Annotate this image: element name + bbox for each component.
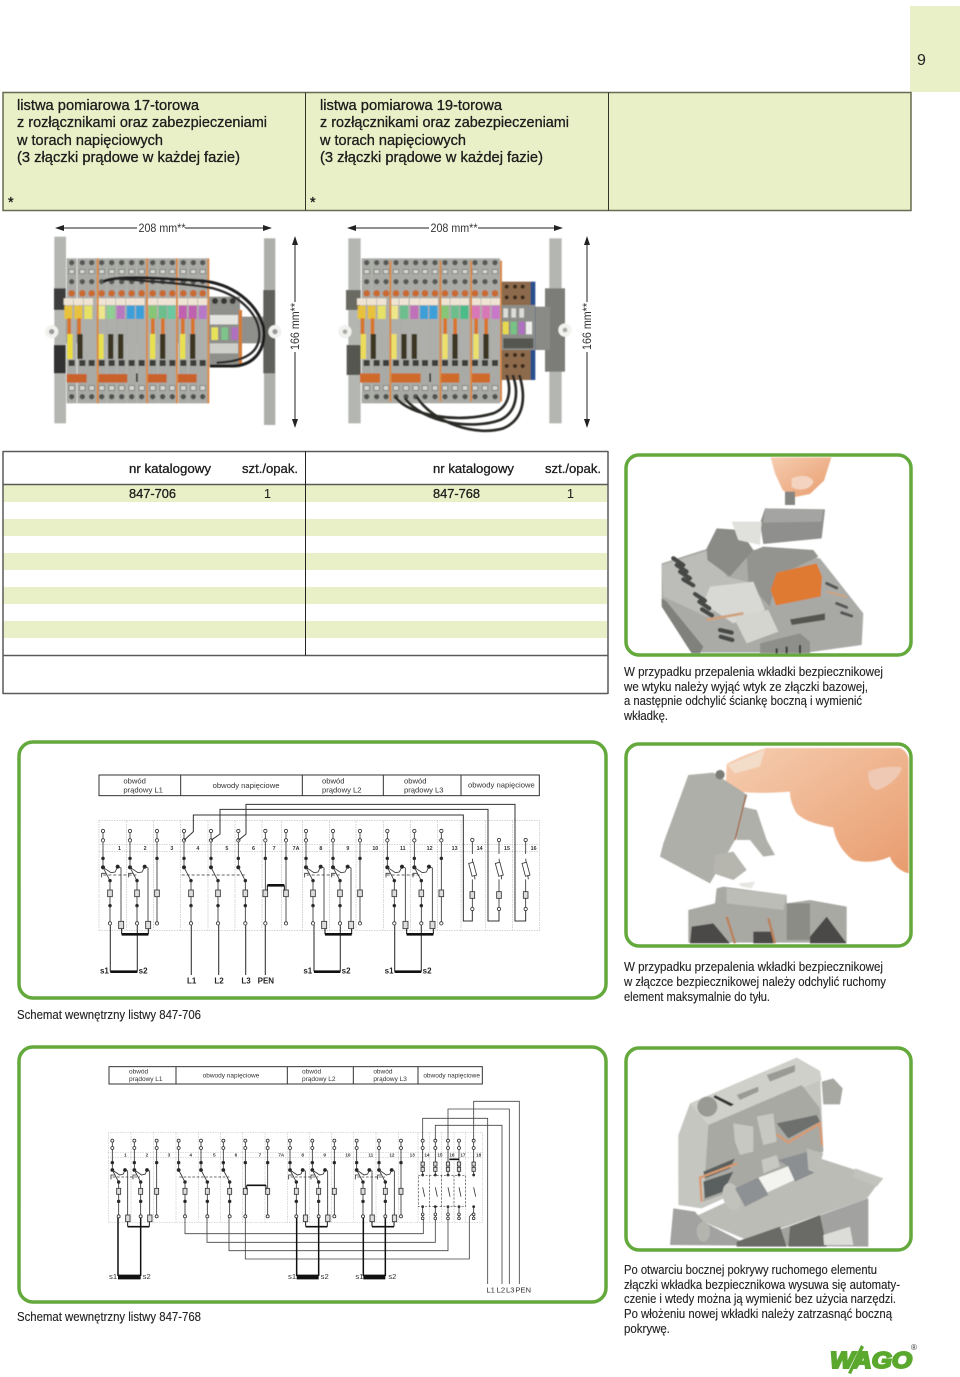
terminal numbers: 16 bbox=[449, 1152, 455, 1157]
product name: 19-way strip: listwa pomiarowa 19-torowa bbox=[320, 98, 503, 114]
photo: plug pulled out by fingers bbox=[662, 457, 863, 653]
table header and values: 847-768: 847-768 bbox=[433, 486, 480, 501]
caption: fuse plug removal: W przypadku przepalenia wkładki bezpiecznikowej bbox=[624, 665, 883, 679]
table header and values: 847-706 bbox=[129, 461, 298, 501]
terminal numbers: 14 bbox=[424, 1152, 430, 1157]
table rules bbox=[3, 451, 608, 694]
product name: 17-way strip: z rozłącznikami oraz zabezpieczeniami bbox=[17, 115, 267, 131]
product name: 17-way strip: (3 złączki prądowe w każdej fazie) bbox=[17, 150, 240, 166]
wire labels: s1 bbox=[100, 966, 109, 975]
photo: 19-way measuring strip with dimensions bbox=[338, 223, 594, 431]
page number tab bbox=[910, 6, 960, 92]
circuit label bar: prądowy L2 bbox=[302, 1076, 336, 1083]
terminal numbers: 6 bbox=[235, 1152, 238, 1157]
terminal numbers: 7A bbox=[278, 1152, 285, 1157]
product name: 19-way strip: z rozłącznikami oraz zabezpieczeniami bbox=[320, 115, 569, 131]
product name: 17-way strip: w torach napięciowych bbox=[16, 133, 163, 149]
circuit label bar: obwód bbox=[322, 777, 345, 786]
wire labels: L3 bbox=[506, 1286, 515, 1295]
wire labels: s2 bbox=[321, 1272, 329, 1281]
dotted grid bbox=[99, 821, 539, 931]
circuit label bar: obwód bbox=[123, 777, 146, 786]
wire labels: PEN bbox=[515, 1286, 531, 1295]
terminal numbers: 6 bbox=[252, 846, 255, 852]
dotted grid bbox=[108, 1133, 482, 1223]
terminal numbers: 14 bbox=[477, 846, 483, 852]
wire labels: s2 bbox=[423, 966, 432, 975]
caption: fuse contact opening bbox=[623, 960, 887, 1004]
terminal numbers: 2 bbox=[144, 846, 147, 852]
terminal modules bbox=[101, 829, 530, 929]
header panel: product names bbox=[3, 92, 911, 211]
circuit label bar: obwód bbox=[129, 1069, 149, 1076]
wire labels: L3 bbox=[241, 976, 251, 985]
logo: WAGO: ® bbox=[911, 1343, 917, 1352]
terminal numbers: 16 bbox=[531, 846, 537, 852]
circuit label bar: obwody napięciowe bbox=[203, 1072, 260, 1079]
terminal numbers: 7A bbox=[293, 846, 300, 852]
logo: WAGO: WAGO bbox=[830, 1347, 912, 1373]
caption: fuse plug removal: we wtyku należy wyjąć wtyk ze złączki bazowej, bbox=[623, 680, 868, 694]
terminal numbers bbox=[124, 1152, 482, 1157]
dashed fuse box bbox=[418, 1175, 466, 1207]
terminal numbers: 15 bbox=[437, 1152, 443, 1157]
dimension: width 208 mm: 208 mm** bbox=[138, 223, 186, 235]
terminal numbers: 17 bbox=[460, 1152, 466, 1157]
terminal numbers: 10 bbox=[372, 846, 378, 852]
caption: wiring diagram 847-768: Schemat wewnętrzny listwy 847-768 bbox=[17, 1310, 201, 1324]
wire labels: L1 bbox=[187, 976, 197, 985]
dimension: height 166 mm bbox=[290, 236, 302, 428]
caption: fuse contact opening: element maksymalnie do tyłu. bbox=[624, 990, 770, 1004]
table header and values: 847-768: nr katalogowy bbox=[433, 461, 514, 476]
wire labels: s1 bbox=[355, 1272, 363, 1281]
dimension: height 166 mm: 166 mm** bbox=[582, 303, 594, 350]
wire labels: L1 bbox=[486, 1286, 495, 1295]
panel: wiring diagram 847-768 bbox=[19, 1047, 606, 1302]
product name: 17-way strip bbox=[8, 98, 267, 211]
panel: opened fuse holder photo bbox=[626, 1048, 911, 1250]
terminal numbers bbox=[118, 846, 537, 852]
terminal numbers: 1 bbox=[118, 846, 121, 852]
table header and values: 847-706: szt./opak. bbox=[242, 461, 298, 476]
table header and values: 847-768: szt./opak. bbox=[545, 461, 601, 476]
schematic 847-768 bbox=[108, 1067, 531, 1295]
terminal numbers: 7 bbox=[259, 1152, 262, 1157]
wire labels: s2 bbox=[143, 1272, 151, 1281]
wire labels: PEN bbox=[258, 976, 274, 985]
caption: fuse contact opening: w złączce bezpiecznikowej należy odchylić ruchomy bbox=[623, 975, 887, 989]
page number tab: 9 bbox=[917, 52, 926, 69]
circuit label bar: obwody napięciowe bbox=[213, 781, 279, 790]
table header and values: 847-768 bbox=[433, 461, 601, 501]
product name: 19-way strip: * bbox=[310, 195, 316, 211]
terminal numbers: 13 bbox=[452, 846, 458, 852]
wire labels bbox=[100, 966, 432, 985]
terminal numbers: 8 bbox=[319, 846, 322, 852]
circuit label bar: obwody napięciowe bbox=[468, 780, 535, 789]
wire labels: L2 bbox=[214, 976, 224, 985]
table header and values: 847-706: 1 bbox=[264, 487, 271, 501]
circuit label bar: obwód bbox=[373, 1069, 393, 1076]
panel: fuse plug removal photo bbox=[626, 455, 911, 655]
table header and values: 847-768: 1 bbox=[567, 487, 574, 501]
caption: wiring diagram 847-706: Schemat wewnętrzny listwy 847-706 bbox=[17, 1008, 201, 1022]
terminal numbers: 7 bbox=[273, 846, 276, 852]
caption: opened fuse holder: pokrywę. bbox=[624, 1322, 670, 1336]
terminal numbers: 5 bbox=[225, 846, 228, 852]
photo: fuse carrier exposed bbox=[670, 1058, 883, 1247]
schematic 847-706 bbox=[99, 775, 539, 985]
wiring bbox=[113, 1101, 519, 1284]
terminal numbers: 1 bbox=[124, 1152, 127, 1157]
caption: fuse plug removal: wkładkę. bbox=[623, 709, 668, 723]
caption: opened fuse holder bbox=[624, 1263, 900, 1336]
dimension: height 166 mm: 166 mm** bbox=[290, 303, 302, 350]
circuit label bar: prądowy L1 bbox=[129, 1076, 163, 1083]
wire labels: s1 bbox=[303, 966, 313, 975]
circuit label bar: prądowy L2 bbox=[322, 785, 362, 794]
wiring bbox=[103, 804, 526, 975]
caption: opened fuse holder: czenie i wtedy można ją wymienić bez użycia narzędzi. bbox=[624, 1292, 896, 1306]
terminal numbers: 4 bbox=[189, 1152, 192, 1157]
circuit label bar: prądowy L3 bbox=[404, 785, 444, 794]
circuit label bar: prądowy L1 bbox=[123, 785, 163, 794]
caption: opened fuse holder: Po włożeniu nowej wkładki należy zatrzasnąć boczną bbox=[624, 1307, 892, 1321]
wire labels: s1 bbox=[109, 1272, 117, 1281]
terminal numbers: 11 bbox=[368, 1152, 374, 1157]
product name: 19-way strip: w torach napięciowych bbox=[319, 133, 466, 149]
product name: 19-way strip bbox=[310, 98, 569, 211]
terminal numbers: 12 bbox=[389, 1152, 395, 1157]
caption: fuse contact opening: W przypadku przepalenia wkładki bezpiecznikowej bbox=[624, 960, 883, 974]
terminal numbers: 2 bbox=[146, 1152, 149, 1157]
dimension: width 208 mm bbox=[347, 223, 563, 235]
ordering table bbox=[3, 451, 608, 694]
dimension: height 166 mm bbox=[582, 236, 594, 428]
circuit label bar: obwody napięciowe bbox=[423, 1072, 480, 1079]
assembly 847-768 bbox=[338, 238, 572, 431]
panel: wiring diagram 847-706 bbox=[19, 742, 606, 998]
terminal modules bbox=[111, 1139, 476, 1222]
wire labels bbox=[109, 1272, 531, 1295]
product name: 17-way strip: * bbox=[8, 195, 14, 211]
circuit label bar: obwód bbox=[404, 777, 427, 786]
table header and values: 847-706: nr katalogowy bbox=[129, 461, 212, 476]
product name: 17-way strip: listwa pomiarowa 17-torowa bbox=[17, 98, 200, 114]
terminal numbers: 4 bbox=[196, 846, 199, 852]
assembly 847-706 bbox=[45, 237, 282, 425]
terminal numbers: 9 bbox=[346, 846, 349, 852]
circuit label bar bbox=[109, 1067, 482, 1084]
current links bbox=[118, 1159, 459, 1277]
terminal numbers: 15 bbox=[504, 846, 510, 852]
caption: fuse plug removal bbox=[623, 665, 883, 723]
panel: fuse contact opening photo bbox=[626, 744, 911, 946]
product name: 19-way strip: (3 złączki prądowe w każdej fazie) bbox=[320, 150, 543, 166]
caption: opened fuse holder: Po otwarciu bocznej pokrywy ruchomego elementu bbox=[624, 1263, 877, 1277]
terminal numbers: 3 bbox=[168, 1152, 171, 1157]
terminal numbers: 10 bbox=[345, 1152, 351, 1157]
terminal numbers: 12 bbox=[427, 846, 433, 852]
dimension: width 208 mm bbox=[55, 223, 272, 235]
terminal numbers: 11 bbox=[400, 846, 406, 852]
dimension: width 208 mm: 208 mm** bbox=[430, 223, 478, 235]
terminal numbers: 9 bbox=[323, 1152, 326, 1157]
wire labels: s1 bbox=[385, 966, 394, 975]
photo: 17-way measuring strip with dimensions bbox=[45, 223, 302, 428]
terminal numbers: 18 bbox=[476, 1152, 482, 1157]
wire labels: s1 bbox=[288, 1272, 296, 1281]
circuit label bar: obwód bbox=[302, 1069, 321, 1076]
wire labels: s2 bbox=[388, 1272, 396, 1281]
terminal numbers: 13 bbox=[410, 1152, 415, 1157]
circuit label bar: prądowy L3 bbox=[373, 1076, 407, 1083]
photo: finger lifting moving element bbox=[660, 748, 909, 943]
terminal numbers: 8 bbox=[301, 1152, 304, 1157]
wire labels: L2 bbox=[497, 1286, 505, 1295]
wire labels: s2 bbox=[342, 966, 351, 975]
caption: opened fuse holder: złączki wkładka bezpiecznikowa wysuwa się automaty- bbox=[624, 1278, 900, 1292]
terminal numbers: 3 bbox=[170, 846, 173, 852]
wire labels: s2 bbox=[139, 966, 148, 975]
table header and values: 847-706: 847-706 bbox=[129, 486, 176, 501]
circuit label bar bbox=[99, 775, 539, 796]
caption: fuse plug removal: a następnie odchylić ściankę boczną i wymienić bbox=[624, 694, 862, 708]
table stripes bbox=[3, 485, 607, 638]
terminal numbers: 5 bbox=[213, 1152, 216, 1157]
